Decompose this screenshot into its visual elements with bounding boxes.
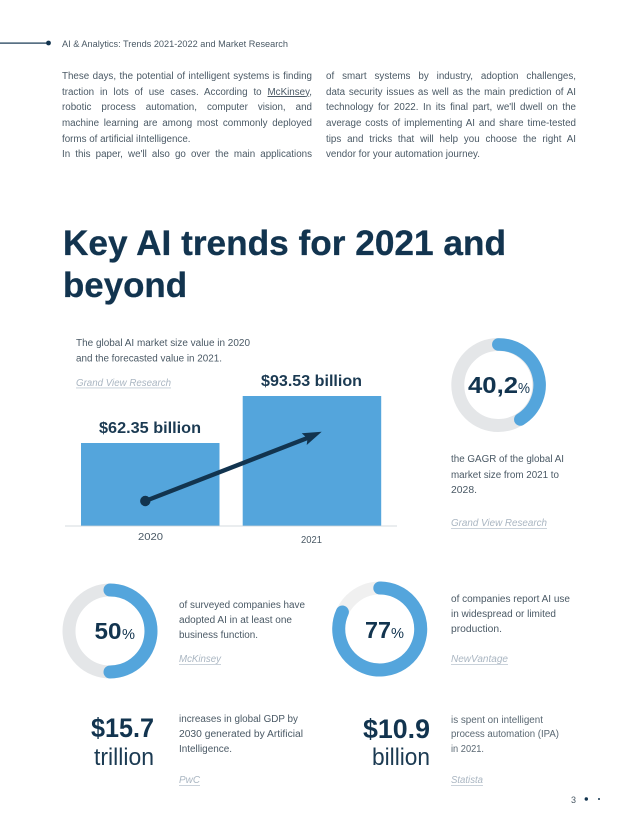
$10.9 billion text: is spent on intelligent [451, 715, 543, 726]
intro text: right column [326, 70, 576, 160]
header text: AI & Analytics: Trends 2021-2022 and Market Research [62, 39, 288, 49]
$10.9 billion text: process automation (IPA) [451, 729, 559, 740]
chart description [76, 338, 251, 364]
title [63, 224, 506, 305]
stat: $10.9 billion: billion [372, 744, 430, 771]
77% text [451, 594, 571, 665]
GAGR text: 2028. [451, 485, 477, 496]
intro text: right column: of smart systems by industry, adoption challenges, [326, 70, 576, 82]
source: Grand View Research: Grand View Research [76, 378, 171, 389]
stat: $15.7 trillion: $15.7 [91, 713, 154, 743]
$10.9 billion text [451, 715, 559, 786]
growth arrow [140, 432, 322, 506]
intro text: left column: traction in lots of use cases. According to McKinsey, [62, 86, 312, 98]
chart description: and the forecasted value in 2021. [76, 354, 222, 364]
axis label 2021: 2021 [301, 535, 322, 546]
title: Key AI trends for 2021 and [63, 224, 506, 263]
title: beyond [63, 266, 187, 305]
bar 2020 [81, 443, 220, 526]
77% text: of companies report AI use [451, 594, 571, 605]
source: Statista: Statista [451, 775, 484, 786]
GAGR text: the GAGR of the global AI [451, 454, 564, 465]
77% text: in widespread or limited [451, 609, 556, 620]
50% text: business function. [179, 630, 258, 641]
bar chart: AI market size [65, 338, 397, 546]
$10.9 billion text: in 2021. [451, 744, 484, 755]
intro text: left column: forms of artificial iIntelligence. [62, 134, 190, 144]
$15.7 trillion text: Intelligence. [179, 744, 232, 755]
donut: 50%: 50 [94, 618, 122, 644]
$15.7 trillion text: increases in global GDP by [179, 714, 298, 725]
source: McKinsey: McKinsey [179, 654, 222, 665]
50% text: of surveyed companies have [179, 600, 306, 611]
donut: 40,2%: 40,2 [468, 372, 518, 398]
donut: 50%: % [122, 626, 135, 643]
intro text: left column: In this paper, we'll also go over the main applications [62, 148, 312, 160]
$15.7 trillion text: 2030 generated by Artificial [179, 729, 303, 740]
$15.7 trillion text [179, 714, 303, 786]
donut: 77%: % [391, 625, 404, 642]
source: PwC: PwC [179, 775, 201, 786]
77% text: production. [451, 624, 502, 635]
donut: 77%: 77 [365, 617, 391, 643]
axis label 2020: 2020 [138, 532, 163, 543]
donut: 50% [69, 590, 151, 672]
page number and dots [571, 795, 600, 805]
source: NewVantage: NewVantage [451, 654, 509, 665]
source: Grand View Research: Grand View Research [451, 518, 547, 529]
intro text: left column: robotic process automation, computer vision, and [62, 102, 312, 112]
stat: $15.7 trillion [91, 713, 154, 771]
stat: $10.9 billion [363, 714, 430, 771]
donut: 40,2%: % [518, 380, 530, 397]
chart description: The global AI market size value in 2020 [76, 338, 251, 349]
donut: 77% [339, 588, 421, 670]
page number and dots: 3 [571, 795, 576, 805]
intro text: left column [62, 70, 312, 160]
intro text: right column: tips and tricks that will help you choose the right AI [326, 134, 576, 144]
value label 2021: $93.53 billion [261, 373, 362, 390]
intro text: left column: machine learning are among most commonly deployed [62, 118, 312, 128]
intro text: right column: average costs of implementing AI and share time-tested [326, 118, 576, 128]
GAGR text: market size from 2021 to [451, 470, 560, 481]
axis [65, 525, 397, 527]
intro text: left column: These days, the potential of intelligent systems is finding [62, 70, 312, 82]
donut: 40,2% [458, 344, 540, 426]
intro text: right column: vendor for your automation journey. [326, 148, 480, 160]
stat: $15.7 trillion: trillion [94, 744, 154, 771]
GAGR text [451, 454, 564, 529]
bar 2021 [243, 396, 381, 526]
intro text: right column: data security issues as well as the main prediction of AI [326, 86, 576, 98]
header rule with dot [0, 41, 51, 45]
50% text [179, 600, 306, 665]
50% text: adopted AI in at least one [179, 615, 293, 626]
value label 2020: $62.35 billion [99, 420, 201, 437]
intro text: right column: technology for 2022. In its final part, we'll dwell on the [326, 102, 576, 112]
stat: $10.9 billion: $10.9 [363, 714, 430, 744]
